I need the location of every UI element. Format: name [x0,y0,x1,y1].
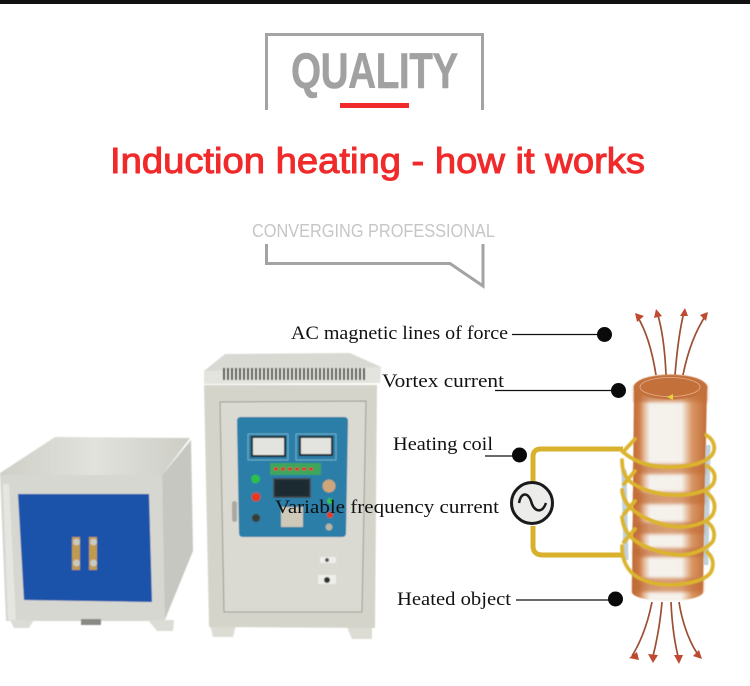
cabinet door [220,401,366,612]
timer [281,507,303,527]
title: Induction heating - how it works [110,140,645,181]
quality badge [266,34,482,110]
AC source symbol [512,482,552,524]
heated cylinder [632,374,707,601]
cylinder shading bands [633,385,707,592]
copper coil [622,435,715,585]
label: variable frequency current: Variable frequency current [275,498,500,518]
furnace feet [10,620,34,628]
speech bracket [266,244,483,286]
heading: QUALITY: QUALITY [291,44,458,99]
label: vortex current [382,372,626,398]
connecting wires [533,449,623,555]
label: heated object: Heated object [397,590,512,610]
door switches [318,557,336,584]
subtitle: converging professional: CONVERGING PROFESSIONAL [252,220,495,241]
label: heating coil: Heating coil [393,435,493,455]
buttons [251,474,336,530]
copper terminals [72,537,97,570]
label: heating coil [393,435,527,462]
indicator strip [270,463,321,475]
cabinet feet [210,625,236,637]
label: vortex current: Vortex current [382,372,505,392]
furnace front [0,475,165,621]
top black strip [0,0,750,4]
cabinet lid [204,353,381,384]
magnetic field arrows, bottom [632,602,700,660]
label: heated object [397,590,623,610]
label: AC magnetic lines of force: AC magnetic lines of force [291,324,508,344]
red accent bar [340,103,409,108]
door handle [232,501,237,522]
furnace blue panel [18,494,152,602]
control cabinet [204,353,381,639]
cabinet body [204,385,377,628]
furnace side [162,440,193,622]
label: AC magnetic lines of force [291,324,612,344]
meters [248,434,336,460]
furnace unit [0,437,193,631]
control panel [237,417,348,537]
furnace top [0,437,190,476]
lid vents [224,368,364,380]
digital display [274,479,310,497]
induction coil diagram [512,308,715,664]
magnetic field arrows, top [637,312,706,375]
coil back strands [624,445,708,565]
cylinder current marker [667,394,673,400]
